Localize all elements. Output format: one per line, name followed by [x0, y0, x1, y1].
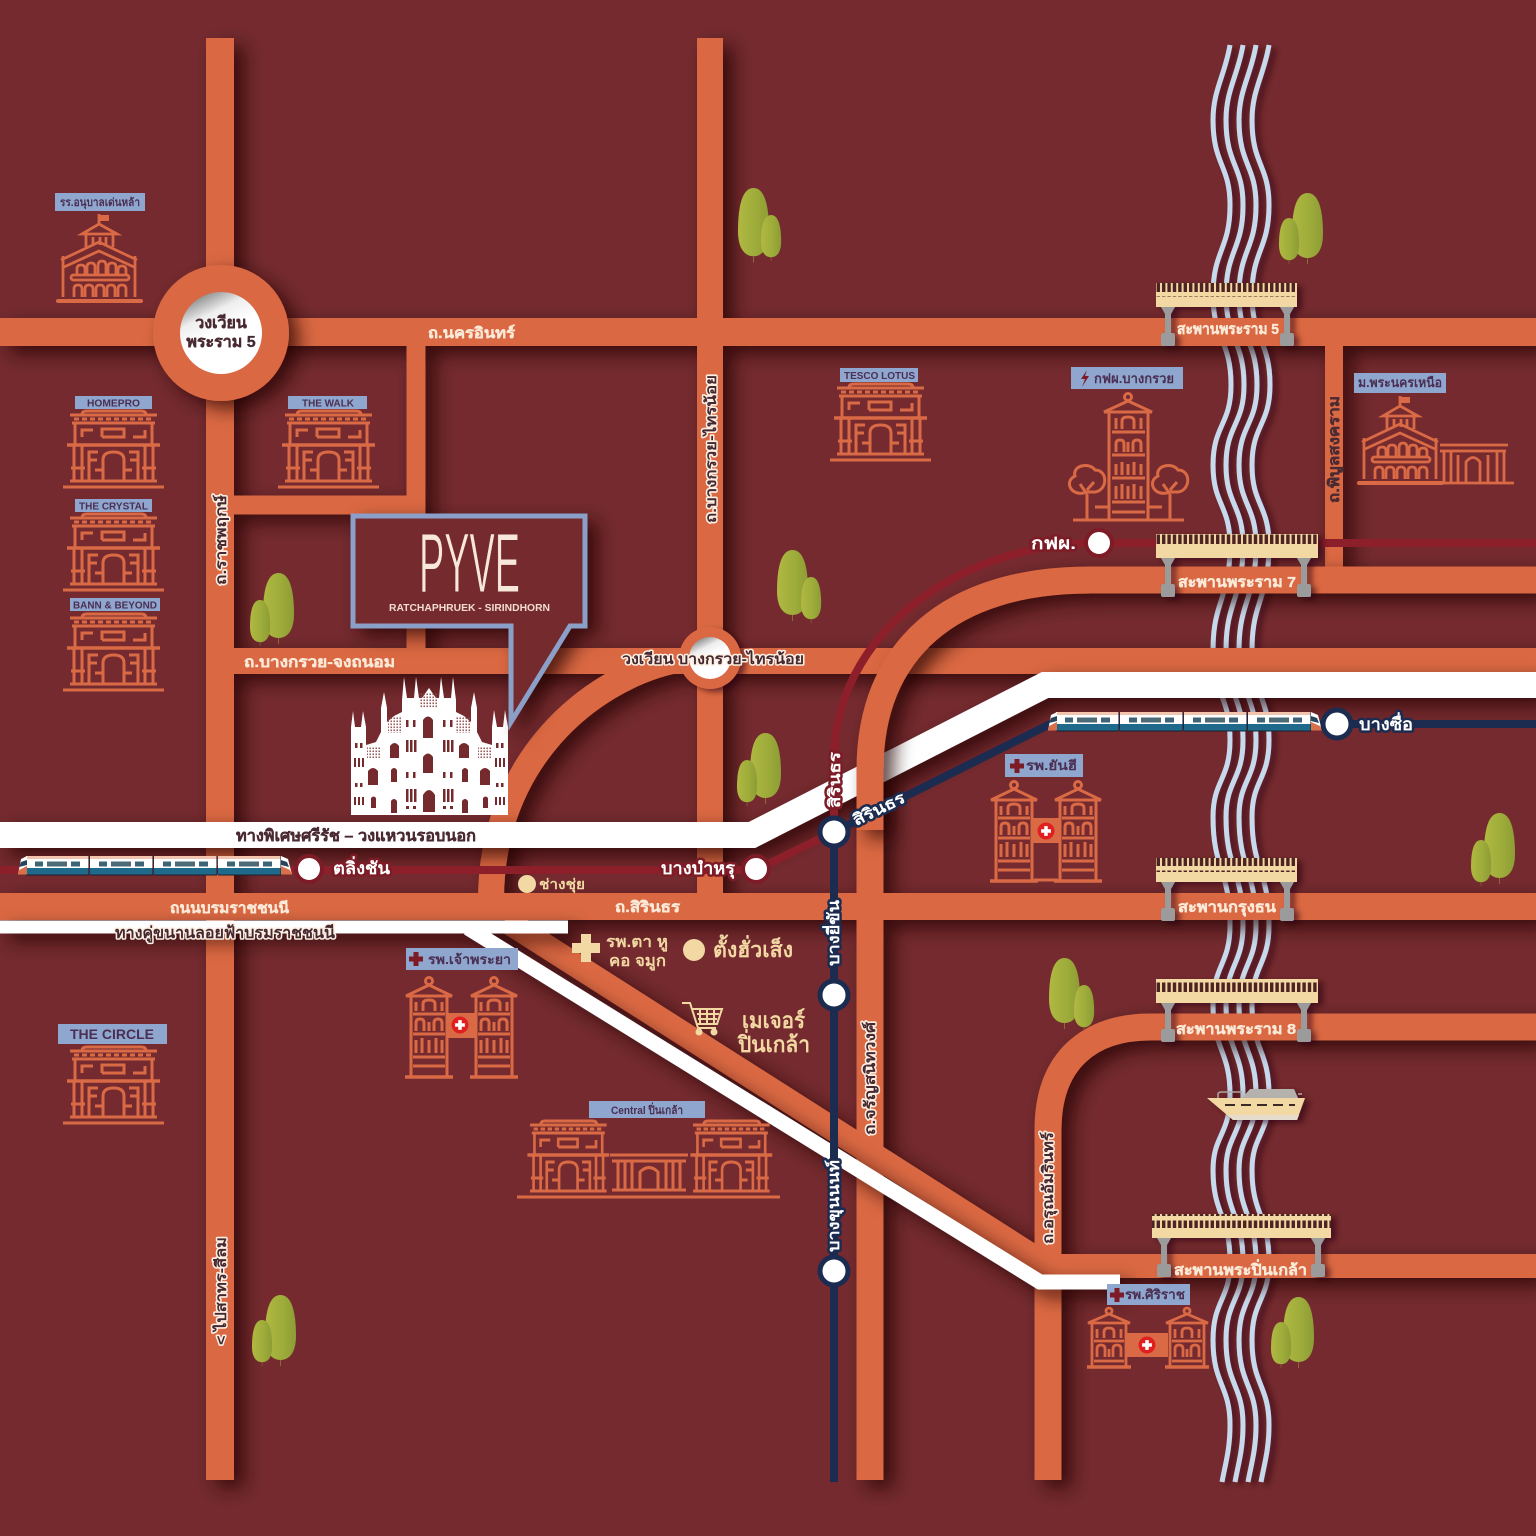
- road: Pibulsongkram: [1325, 340, 1343, 575]
- icon: hospital badge: [452, 1016, 468, 1034]
- bridge: Rama 7: [1156, 534, 1318, 597]
- elevated road: parallel Borommaratchachonnani: [0, 920, 568, 934]
- expressway: Si Rat - Outer Ring: [0, 685, 1536, 835]
- stations: [296, 530, 1351, 1285]
- text: Chang Chui: ช่างชุ่ย: [539, 876, 585, 893]
- label: Bang Kruai-Sai Noi road: ถ.บางกรวย-ไทรน้อย: [701, 375, 720, 523]
- building: Anuban school: [55, 193, 145, 301]
- landmark: white cathedral: [351, 677, 508, 815]
- building: The Walk: THE WALK: [302, 398, 355, 410]
- landmark: Major Pinklao: [682, 1003, 810, 1057]
- label: Rama 5 bridge: สะพานพระราม 5: [1177, 321, 1279, 338]
- road: Rama 7 curve over the expressway: [870, 580, 1536, 830]
- label: Bang Khun Non: บางขุนนนท์: [824, 1160, 844, 1252]
- icon: plus: [572, 934, 600, 962]
- building: Rajamangala University: [1354, 373, 1514, 483]
- windows: [354, 716, 505, 813]
- station: Bang Yi Khan: [820, 981, 848, 1009]
- elevated road: diagonal: [468, 928, 1120, 1282]
- label: Rama 8 bridge: สะพานพระราม 8: [1176, 1021, 1296, 1038]
- building: Tesco Lotus: TESCO LOTUS: [844, 371, 915, 382]
- river: four wavy lines: [1213, 45, 1270, 1482]
- road and station labels: [115, 321, 1413, 1345]
- road: curve to Borommaratchachonnani: [491, 661, 672, 900]
- road: vertical Ratchaphruek: [206, 38, 234, 1480]
- label: Charansanitwong: ถ.จรัญสนิทวงศ์: [861, 1021, 879, 1135]
- label: Rama 5 circle: พระราม 5: [186, 334, 256, 351]
- text: Major Pinklao: ปิ่นเกล้า: [737, 1028, 810, 1057]
- building: Tesco Lotus: [830, 368, 931, 460]
- label: expressway: ทางพิเศษศรีรัช – วงแหวนรอบนอก: [236, 826, 476, 845]
- label: Borommaratchachonnani: ถนนบรมราชชนนี: [170, 900, 290, 917]
- road: Arun Amarin with Rama 8 curve: [1048, 1027, 1536, 1480]
- building: HomePro: HOMEPRO: [87, 398, 140, 410]
- label: Bang Yi Khan: บางยี่ขัน: [822, 900, 843, 966]
- building: HomePro: [63, 396, 164, 487]
- boat: [1207, 1089, 1305, 1120]
- icon: hospital badge: [1138, 1336, 1156, 1354]
- landmark: Tang Hua Seng: ตั้งฮั่วเส็ง: [713, 934, 793, 962]
- building: Siriraj Hospital: [1087, 1284, 1209, 1367]
- icon: lightning: [1081, 370, 1089, 387]
- building: Bann and Beyond: [63, 598, 164, 690]
- building: Yanhee Hospital: รพ.ยันฮี: [1026, 758, 1077, 773]
- icon: cross: [409, 952, 423, 966]
- label: to Sathon-Silom: < ไปสาทร-สีลม: [211, 1237, 230, 1345]
- icon: Chang Chui dot: [518, 875, 536, 893]
- station: EGAT: [1086, 530, 1112, 556]
- building: Central Pinklao: Central ปิ่นเกล้า: [611, 1102, 683, 1117]
- tree 4: [777, 550, 821, 623]
- label: Pibulsongkram: ถ.พิบูลสงคราม: [1325, 396, 1344, 503]
- road: small branch by The Walk: [225, 340, 425, 660]
- building: The Walk: [278, 396, 379, 487]
- label: Rama 7 bridge: สะพานพระราม 7: [1178, 574, 1296, 591]
- station: Bang Sue: [1323, 710, 1351, 738]
- label: Pinklao bridge: สะพานพระปิ่นเกล้า: [1174, 1259, 1307, 1279]
- metro: navy line: [834, 724, 1536, 1482]
- tree 6: [1471, 813, 1515, 886]
- icon: shopping cart: [682, 1003, 722, 1034]
- label: Ratchaphruek road: ถ.ราชพฤกษ์: [212, 495, 230, 585]
- icon: hospital badge: [1038, 822, 1054, 840]
- building: The Crystal: [63, 499, 164, 590]
- building: Anuban school: รร.อนุบาลเด่นหล้า: [60, 196, 140, 210]
- building: Siriraj Hospital: รพ.ศิริราช: [1125, 1287, 1185, 1302]
- building: Bann and Beyond: BANN & BEYOND: [73, 600, 157, 612]
- label: Bang Kruai-Sai Noi roundabout: วงเวียน บางกรวย-ไทรน้อย: [622, 649, 804, 668]
- bridge: Rama 8: [1156, 979, 1318, 1042]
- icon: right tree: [1152, 465, 1188, 520]
- building: Central Pinklao: [517, 1101, 780, 1197]
- text: ENT hospital: คอ จมูก: [609, 953, 666, 972]
- label: Bang Sue: บางซื่อ: [1359, 712, 1413, 734]
- road: Sirinthorn and Borommaratchachonnani: [0, 893, 1536, 920]
- label: Sirinthorn red line: สิรินธร: [826, 752, 844, 808]
- text: Major Pinklao: เมเจอร์: [742, 1008, 805, 1033]
- callout: PYVE project: PYVE: [419, 516, 520, 610]
- label: Krung Thon bridge: สะพานกรุงธน: [1178, 899, 1277, 917]
- lace galleries: [367, 693, 491, 758]
- road: diagonal to Pinklao bridge: [505, 920, 1536, 1266]
- bridge: Krung Thon: [1156, 858, 1297, 921]
- roundabout: Bang Kruai-Sai Noi: [679, 627, 741, 689]
- landmark: ENT hospital: [572, 934, 668, 972]
- tree 9: [1271, 1297, 1314, 1368]
- building: Rajamangala University: ม.พระนครเหนือ: [1358, 375, 1442, 390]
- station: Taling Chan: [296, 856, 322, 882]
- tree 8: [252, 1295, 296, 1366]
- metro: red line: [0, 543, 1536, 870]
- label: Bang Bamru: บางบำหรุ: [661, 859, 736, 879]
- building: Chao Phraya Hospital: [405, 948, 518, 1077]
- building: Chao Phraya Hospital: รพ.เจ้าพระยา: [428, 952, 511, 967]
- label: Nakhon In road: ถ.นครอินทร์: [428, 324, 516, 342]
- label: Bang Kruai-Chong Thanom road: ถ.บางกรวย-จงถนอม: [244, 654, 395, 671]
- bridge: Pinklao: [1152, 1214, 1331, 1277]
- roundabout: Rama 5: [153, 265, 289, 401]
- label: Taling Chan: ตลิ่งชัน: [333, 856, 390, 878]
- building: Yanhee Hospital: [990, 754, 1102, 881]
- bridge: Rama 5: [1156, 283, 1297, 346]
- tree 5: [737, 733, 781, 806]
- tree 7: [1049, 958, 1094, 1031]
- label: Sirinthorn navy line: สิรินธร: [850, 789, 909, 830]
- landmark: Tang Hua Seng: [683, 934, 793, 962]
- white expressways: [0, 685, 1536, 1282]
- train: Bang Sue: [1048, 712, 1322, 732]
- road: vertical Bang Kruai-Sai Noi: [697, 38, 723, 900]
- building: EGAT Bang Kruai: กฟผ.บางกรวย: [1094, 371, 1174, 386]
- label: Arun Amarin: ถ.อรุณอัมรินทร์: [1039, 1131, 1058, 1244]
- icon: left tree: [1069, 465, 1105, 520]
- train: Taling Chan: [18, 856, 292, 876]
- label: parallel elevated road: ทางคู่ขนานลอยฟ้าบรมราชชนนี: [115, 923, 335, 944]
- label: EGAT station: กฟผ.: [1031, 534, 1076, 553]
- icon: cross: [1110, 1288, 1124, 1302]
- tagline: RATCHAPHRUEK - SIRINDHORN: [389, 603, 550, 614]
- building: EGAT Bang Kruai: [1069, 367, 1188, 520]
- station: Bang Khun Non: [820, 1257, 848, 1285]
- building: The Circle: [58, 1024, 167, 1123]
- trees: [250, 188, 1515, 1368]
- building: The Crystal: THE CRYSTAL: [79, 502, 148, 512]
- label: Sirinthorn road: ถ.สิรินธร: [615, 898, 681, 916]
- label: Rama 5 circle: วงเวียน: [195, 313, 247, 332]
- building: The Circle: THE CIRCLE: [70, 1026, 154, 1042]
- road: Charansanitwong lower: [856, 780, 884, 1480]
- station: Bang Bamru: [743, 856, 769, 882]
- tree 1: [738, 188, 781, 263]
- icon: cross: [1010, 759, 1024, 773]
- road: Bang Kruai-Chong Thanom: [225, 648, 1536, 674]
- tree 2: [1279, 193, 1323, 264]
- text: ENT hospital: รพ.ตา หู: [606, 934, 668, 953]
- callout: PYVE project: [353, 516, 585, 722]
- station: Sirinthorn: [820, 818, 848, 846]
- tree 3: [250, 573, 294, 646]
- road: Nakhon In: [0, 318, 1536, 346]
